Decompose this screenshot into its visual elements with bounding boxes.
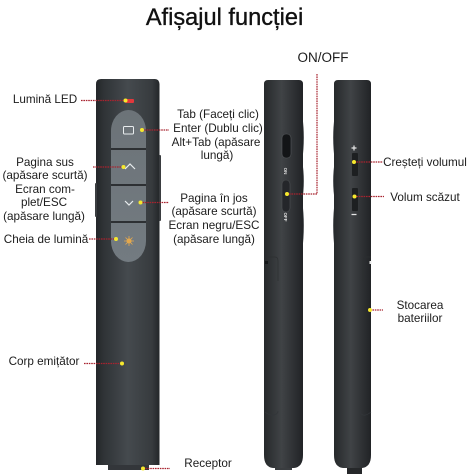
callout: page down: Ecran negru/ESC	[169, 219, 259, 232]
callout: receiver: Receptor	[184, 457, 232, 470]
callout: page down: (apăsare scurtă)	[171, 205, 257, 218]
switch labels: OFF	[283, 212, 288, 222]
button panel	[111, 110, 146, 262]
callout: emitter body	[9, 355, 124, 368]
callout: volume up: Creșteți volumul	[383, 156, 467, 169]
callout: page down: (apăsare lungă)	[173, 233, 255, 246]
callout: LED: Lumină LED	[13, 93, 77, 106]
callout: on off: ON/OFF	[298, 50, 348, 65]
power switch	[282, 180, 290, 212]
device: side view with volume buttons	[333, 80, 372, 474]
callout: page up	[2, 156, 126, 223]
callout: page up: plet/ESC	[21, 196, 67, 209]
callout: laser key: Cheia de lumină	[4, 233, 89, 246]
callout: LED	[13, 93, 128, 106]
callout: page up: (apăsare scurtă)	[2, 169, 88, 182]
volume rocker up	[352, 153, 358, 176]
callout: page down	[138, 192, 259, 246]
callout: tab enter: Tab (Faceți clic)	[177, 108, 259, 121]
led	[125, 99, 134, 103]
callout: tab enter: Alt+Tab (apăsare	[172, 136, 260, 149]
icon: rectangle button	[124, 126, 134, 134]
callout: volume down	[352, 191, 461, 204]
icon: laser sun	[124, 236, 134, 246]
icon: down chevron	[125, 201, 133, 205]
callout: page down: Pagina în jos	[180, 192, 248, 205]
volume rocker down	[352, 188, 358, 211]
callout: battery storage: Stocarea	[397, 299, 444, 312]
callout: on off	[285, 50, 348, 196]
switch labels: ON	[283, 168, 288, 174]
callout: tab enter: Enter (Dublu clic)	[173, 122, 263, 135]
callout: battery storage: bateriilor	[398, 312, 443, 325]
callout: receiver	[141, 457, 232, 470]
callout: page up: (apăsare lungă)	[3, 210, 85, 223]
callout: page up: Pagina sus	[16, 156, 74, 169]
switch labels	[283, 168, 288, 222]
device: side view with USB and switch	[264, 80, 304, 470]
callout: tab enter	[140, 108, 263, 162]
callout: battery storage	[368, 299, 444, 325]
device: front view	[95, 79, 161, 470]
usb port	[282, 134, 291, 158]
title: Afișajul funcției	[146, 5, 303, 31]
callout: page up: Ecran com-	[15, 183, 75, 196]
callout: emitter body: Corp emițător	[9, 355, 80, 368]
icon: up chevron	[125, 164, 135, 169]
callout: tab enter: lungă)	[201, 149, 233, 162]
callout: volume down: Volum scăzut	[390, 191, 461, 204]
plus and minus	[352, 146, 356, 214]
